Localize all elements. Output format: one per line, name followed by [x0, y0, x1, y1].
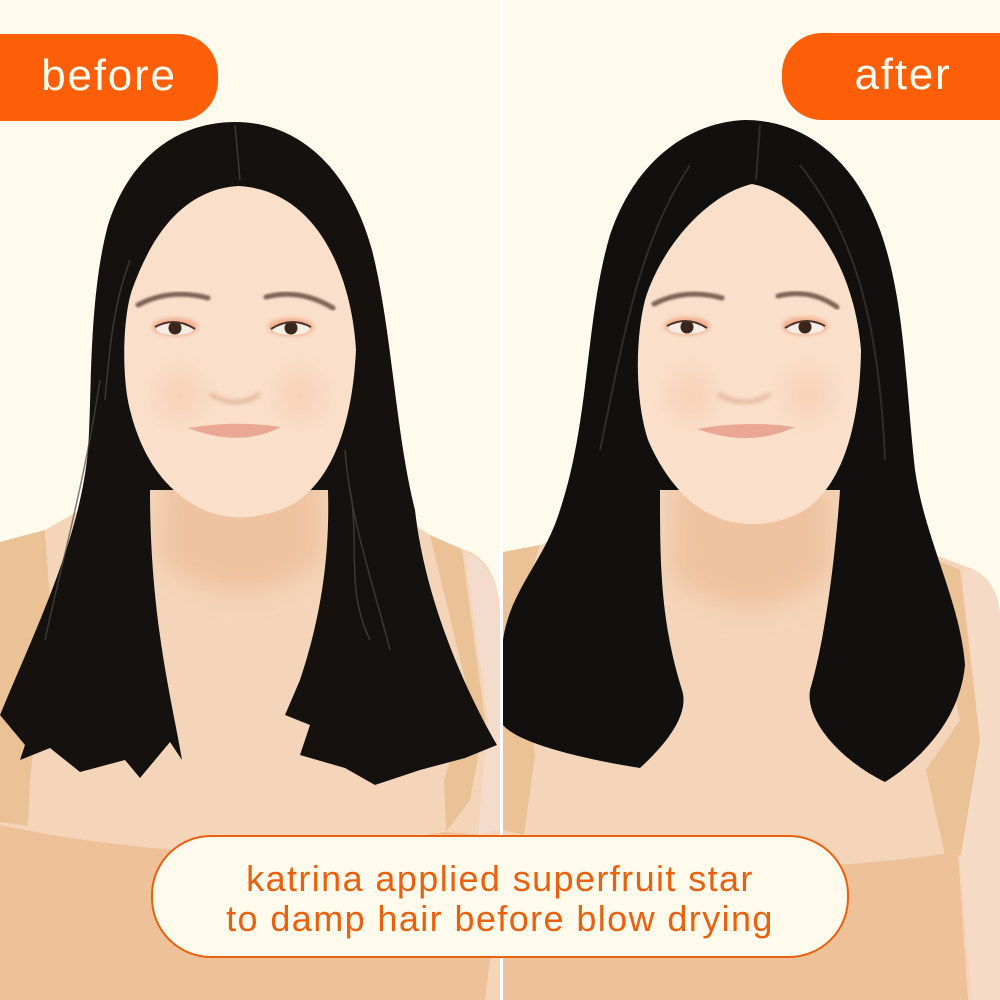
- before: hair: [0, 122, 497, 785]
- divider: [500, 0, 503, 1000]
- after: face: [638, 184, 861, 524]
- before: hair highlights: [45, 125, 390, 650]
- after: hair highlights: [600, 125, 885, 460]
- before portrait: [0, 122, 500, 1000]
- before: nose: [210, 394, 260, 402]
- before: mouth: [188, 424, 281, 438]
- caption: [151, 835, 849, 958]
- before: cheeks: [156, 367, 324, 423]
- after: top: [503, 854, 968, 1000]
- after tag: [782, 33, 1000, 120]
- after: eyes: [664, 317, 828, 335]
- before: brows: [138, 294, 333, 308]
- after: nose: [718, 394, 770, 402]
- caption: katrina applied superfruit star: [246, 858, 754, 899]
- after: cheeks: [666, 367, 832, 423]
- after: brows: [654, 294, 837, 307]
- after: hair: [503, 120, 965, 782]
- after tag: after: [854, 50, 952, 99]
- before: top: [0, 825, 490, 1000]
- before: shoulder straps: [0, 530, 485, 832]
- after: shoulder straps: [503, 545, 980, 855]
- before: arm: [465, 552, 500, 835]
- after: neck shadow: [670, 480, 832, 608]
- before: face: [124, 186, 356, 517]
- before: shoulders and chest: [0, 470, 500, 1000]
- before: eyes: [152, 318, 314, 336]
- after: mouth: [697, 424, 795, 438]
- after: arm: [960, 570, 1000, 1000]
- before tag: [0, 34, 218, 121]
- before: neck shadow: [160, 470, 322, 592]
- caption: to damp hair before blow drying: [226, 898, 774, 939]
- after: shoulders and chest: [503, 480, 1000, 1000]
- before tag: before: [41, 51, 177, 100]
- after portrait: [503, 120, 1000, 1000]
